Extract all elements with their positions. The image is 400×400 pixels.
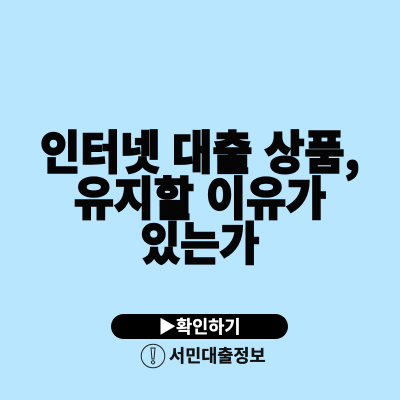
brand label: 서민대출정보: [169, 343, 266, 368]
icon: exclamation circle: [140, 344, 166, 368]
title line 2: 유지할 이유가: [74, 162, 326, 229]
button: confirm: [111, 314, 288, 339]
title line 1: 인터넷 대출 상품,: [40, 116, 360, 183]
title line 3: 있는가: [141, 208, 259, 274]
button: confirm: ▶확인하기: [159, 314, 240, 339]
